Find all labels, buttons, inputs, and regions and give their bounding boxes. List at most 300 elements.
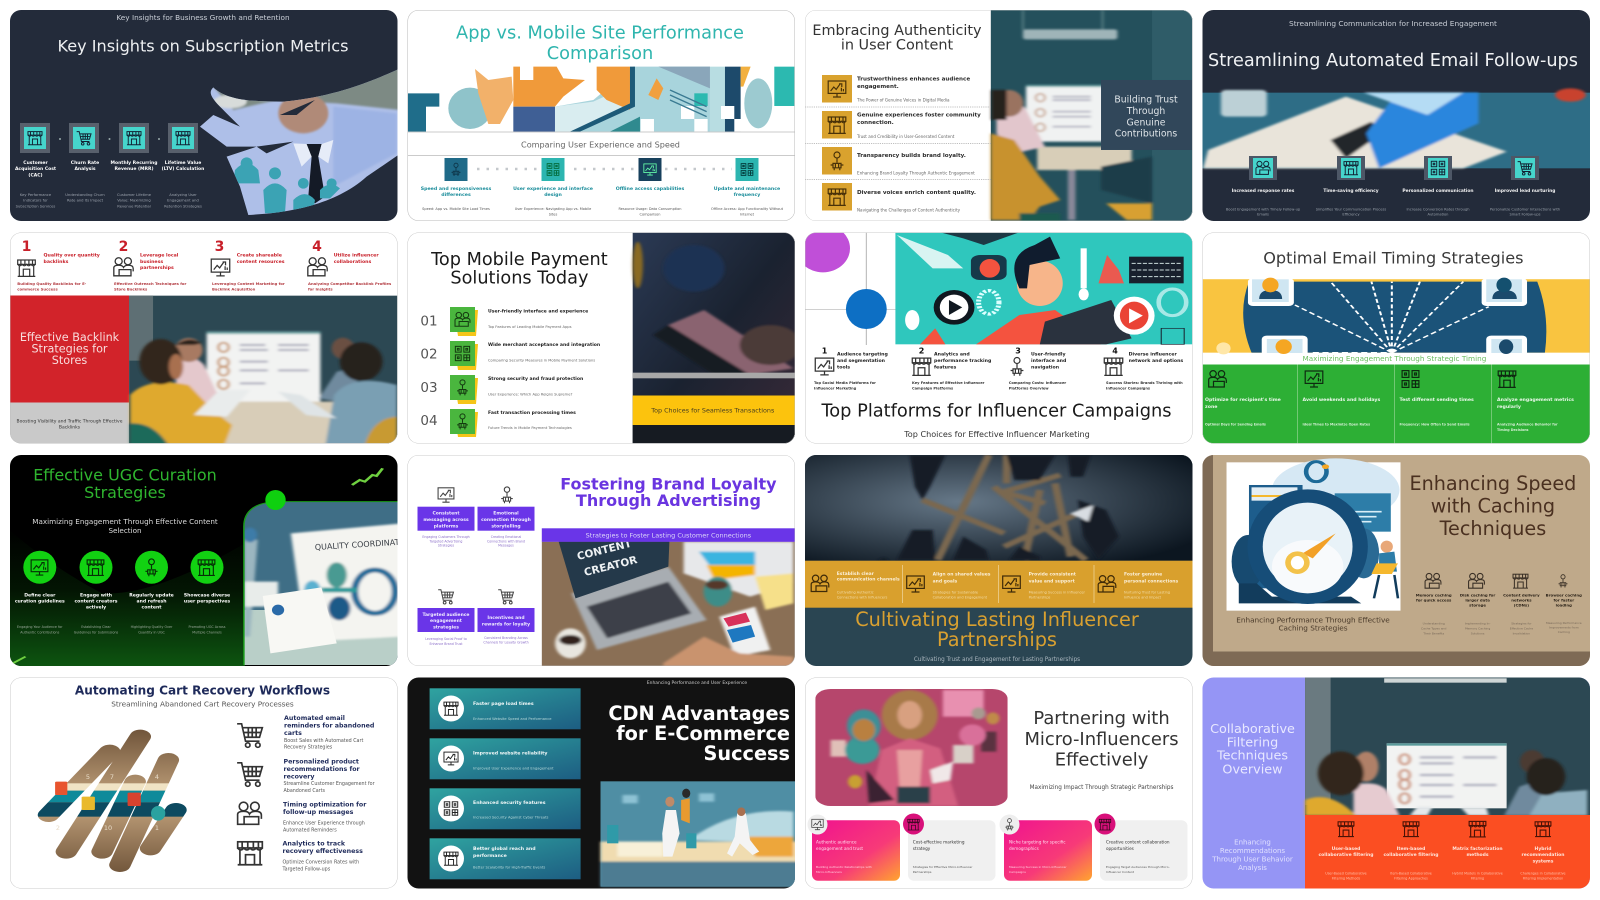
step headings: Leverage local	[140, 252, 179, 258]
list descriptions: Optimize Conversion Rates with	[282, 860, 359, 866]
step descriptions: Effective Outreach Techniques for	[114, 281, 186, 286]
title: Key Insights on Subscription Metrics	[57, 36, 349, 56]
dark frame	[1202, 455, 1591, 667]
numbers: 01	[420, 314, 438, 330]
title: Cultivating Lasting Influencer	[855, 608, 1139, 631]
metric labels: (CAC)	[28, 172, 43, 178]
diagonal wood stripes chart	[26, 727, 194, 877]
stripe numbers: 2	[56, 824, 60, 832]
descriptions: Establishing Clear	[81, 625, 111, 629]
green icons	[450, 307, 478, 437]
card headings: Authentic audience	[816, 840, 857, 844]
green columns: Frequency: How Often to Send Emails	[1400, 422, 1470, 426]
descriptions: Automation	[1428, 212, 1448, 216]
subtitle: Streamlining Communication for Increased Engagement	[1289, 19, 1497, 28]
decorative circles	[796, 224, 897, 345]
feature descriptions: Hybrid Models in Collaborative	[1452, 872, 1503, 876]
title: App vs. Mobile Site Performance	[456, 22, 744, 43]
numbers: 04	[420, 413, 438, 429]
band headings: Align on shared values	[933, 572, 991, 578]
strategy descriptions: Connections with Brand	[487, 539, 525, 543]
metric descriptions: Engagement and	[167, 198, 199, 202]
technique labels: larger data	[1465, 598, 1490, 602]
list descriptions: Enhance User Experience through	[283, 820, 365, 826]
photo: phone payment with caption band: Top Choices for Seamless Transactions	[650, 407, 775, 415]
descriptions: Quantity in UGC	[138, 630, 166, 634]
descriptions: Smart Follow-ups	[1509, 212, 1541, 216]
panel: Embracing Authenticity in User Content	[805, 10, 1195, 223]
step headings: Audience targeting	[837, 352, 888, 358]
metric descriptions: Subscription Services	[16, 204, 55, 208]
step icons	[815, 358, 1123, 376]
photo: quality coordinator certificates	[243, 490, 403, 667]
title: Automating Cart Recovery Workflows	[75, 684, 330, 698]
step headings: content resources	[237, 259, 285, 265]
descriptions: Simplifies Your Communication Process	[1316, 208, 1386, 212]
card descriptions: Campaigns	[1009, 870, 1026, 874]
title: Through Advertising	[576, 491, 761, 510]
subtitle: Analysis	[1238, 864, 1267, 872]
green columns: Analyzing Audience Behavior for	[1497, 422, 1558, 426]
step headings: navigation	[1031, 364, 1059, 370]
metric labels: Revenue (MRR)	[114, 166, 154, 172]
numbers: 02	[420, 346, 438, 362]
list headings: connection.	[857, 120, 894, 126]
subtitle: Caching Strategies	[1278, 624, 1348, 633]
screen text: CREATOR	[583, 554, 639, 579]
purple strategy buttons: Consistent	[432, 510, 460, 516]
descriptions: Personalize Customer Interactions with	[1490, 208, 1560, 212]
list descriptions: Abandoned Carts	[284, 788, 325, 794]
band headings: communication channels	[837, 576, 900, 582]
step descriptions: Comparing Costs: Influencer	[1009, 381, 1066, 385]
labels: Engage with	[80, 592, 112, 598]
title: Optimal Email Timing Strategies	[1263, 248, 1524, 267]
step headings: interface and	[1031, 358, 1066, 364]
screen text: CONTENT	[576, 538, 634, 563]
card descriptions	[816, 865, 1170, 874]
card headings: opportunities	[1106, 846, 1134, 851]
technique descriptions: Effective Cache	[1510, 626, 1533, 630]
technique descriptions: Solutions	[1471, 632, 1485, 636]
step descriptions: Backlink Acquisition	[212, 286, 256, 292]
feature labels: Offline access capabilities	[616, 186, 684, 192]
panel: Effective Backlink Strategies for Stores	[10, 232, 399, 445]
red title block: Effective Backlink	[20, 331, 120, 344]
card descriptions: Building Authentic Relationships with	[816, 865, 872, 869]
technique labels: loading	[1556, 602, 1572, 608]
feature labels: User experience and interface	[513, 186, 593, 192]
photo: woman in pink blazer with floating objects	[815, 689, 1008, 806]
descriptions: Engaging Your Audience for	[17, 625, 63, 629]
subtitle: Streamlining Abandoned Cart Recovery Processes	[111, 700, 294, 709]
orange features block	[1305, 815, 1591, 890]
card headings: Cost-effective marketing	[913, 840, 965, 844]
list headings: engagement.	[857, 84, 899, 90]
feature labels: collaborative filtering	[1319, 852, 1373, 858]
band headings: Provide consistent	[1029, 572, 1077, 578]
subtitle strip	[407, 132, 795, 156]
title: Overview	[1222, 762, 1283, 777]
list headings: Genuine experiences foster community	[857, 112, 981, 118]
illustration: man with megaphone on teal	[895, 232, 1196, 344]
title: Top Mobile Payment	[430, 250, 608, 270]
grey subtitle block	[10, 402, 129, 444]
step headings: tools	[837, 364, 850, 370]
panel: Top Platforms for Influencer Campaigns	[796, 224, 1196, 444]
descriptions: Highlighting Quality Over	[131, 625, 173, 629]
step descriptions: Top Social Media Platforms for	[814, 381, 876, 385]
photo: businessman in blue shirt revealed through a torn shape	[197, 67, 400, 217]
card descriptions: Micro-Influencers	[816, 870, 842, 874]
metric labels: Analysis	[74, 166, 96, 172]
list headings: recovery	[284, 774, 315, 781]
metric descriptions: Understanding Churn	[65, 193, 105, 197]
panel: Streamlining Automated Email Follow-ups	[1201, 10, 1593, 221]
illustration: speed gauge with server	[1227, 458, 1401, 611]
step descriptions: Analyzing Competitor Backlink Profiles	[308, 281, 392, 286]
labels: Improved lead nurturing	[1495, 188, 1555, 194]
step numbers: 3	[215, 239, 224, 255]
list headings: Fast transaction processing times	[488, 410, 576, 416]
feature descriptions: User Experience: Navigating App vs. Mobile	[515, 207, 591, 211]
green background wave	[8, 468, 383, 667]
technique labels: (CDNs)	[1514, 602, 1529, 608]
photo: people climbing wooden scaffold	[800, 453, 1198, 561]
card descriptions: Engaging Target Audiences through Micro-	[1106, 865, 1170, 869]
list headings: recommendations for	[284, 766, 361, 773]
title: Collaborative	[1210, 722, 1295, 737]
feature labels: Speed and responsiveness	[421, 186, 491, 192]
feature labels: systems	[1533, 858, 1554, 864]
stripe numbers: 1	[155, 824, 159, 832]
feature descriptions: Filtering Methods	[1332, 877, 1360, 881]
icon row	[20, 123, 198, 153]
band descriptions: Measuring Success in Influencer	[1029, 590, 1086, 594]
card headings: engagement and trust	[816, 846, 863, 851]
descriptions: Increase Conversion Rates through	[1406, 208, 1470, 212]
panel: Top Mobile Payment Solutions Today	[408, 232, 801, 444]
list headings: follow-up messages	[283, 809, 354, 816]
metric labels: Acquisition Cost	[15, 166, 57, 172]
panel: Collaborative Filtering Techniques Overview	[1202, 677, 1596, 890]
step headings: backlinks	[44, 259, 69, 265]
side caption: Genuine	[1127, 117, 1166, 128]
title: Partnering with	[1033, 708, 1170, 729]
feature labels: User-based	[1332, 846, 1360, 852]
step descriptions: Success Stories: Brands Thriving with	[1106, 381, 1183, 385]
list headings: Transparency builds brand loyalty.	[857, 153, 966, 159]
panel: Cultivating Lasting Influencer Partnerships	[800, 453, 1198, 666]
step numbers: 4	[312, 239, 322, 255]
technique descriptions: Improvements from	[1549, 626, 1579, 630]
metric labels: Monthly Recurring	[111, 160, 157, 166]
technique labels: Disk caching for	[1460, 592, 1495, 598]
feature labels: methods	[1466, 852, 1489, 858]
photo: team meeting at whiteboard	[129, 296, 399, 445]
purple strategy buttons: rewards for loyalty	[482, 622, 530, 628]
list descriptions: Automated Reminders	[283, 828, 337, 834]
band headings: personal connections	[1124, 578, 1178, 584]
subtitle: Cultivating Trust and Engagement for Lasting Partnerships	[914, 657, 1080, 663]
feature labels: Hybrid	[1535, 846, 1551, 852]
band descriptions: Strategies for Sustainable	[933, 590, 978, 594]
card headings: demographics	[1009, 846, 1039, 851]
technique labels: Browser caching	[1546, 592, 1582, 598]
feature labels: design	[544, 192, 562, 198]
list headings: Trustworthiness enhances audience	[857, 76, 970, 82]
step numbers: 1	[22, 239, 31, 255]
labels: content creators	[74, 598, 118, 604]
list headings: Wide merchant acceptance and integration	[488, 342, 600, 348]
green columns: regularly	[1497, 404, 1521, 410]
feature headings: Faster page load times	[473, 701, 534, 707]
feature descriptions: Item-Based Collaborative	[1390, 872, 1432, 876]
panel: Automating Cart Recovery Workflows	[10, 678, 398, 888]
subtitle: Selection	[108, 526, 142, 535]
panel: Partnering with Micro-Influencers Effectively	[805, 678, 1192, 888]
card descriptions: Measuring Success in Micro-Influencer	[1009, 865, 1067, 869]
step headings: Diverse influencer	[1129, 352, 1177, 358]
metric descriptions: Value: Maximizing	[117, 198, 151, 202]
technique descriptions: Their Benefits	[1422, 632, 1445, 636]
teal icons	[1249, 156, 1539, 180]
step headings: Create shareable	[237, 252, 282, 258]
feature descriptions: Offline Access: App Functionality Without	[711, 207, 784, 211]
numbers: 03	[420, 380, 438, 396]
band headings: value and support	[1029, 578, 1076, 584]
feature labels: recommendation	[1522, 852, 1564, 858]
tagline: Maximizing Engagement Through Strategic Timing	[1302, 354, 1486, 363]
descriptions: Promoting UGC Across	[189, 625, 226, 629]
list descriptions: User Experience: Which App Reigns Supreme?	[488, 392, 572, 396]
technique labels: Content delivery	[1503, 592, 1540, 598]
technique descriptions: Caching	[1558, 630, 1570, 634]
step descriptions: Store Backlinks	[114, 286, 148, 292]
labels: Personalized communication	[1402, 188, 1474, 194]
band descriptions: Collaboration and Engagement	[933, 596, 988, 600]
list descriptions: Navigating the Challenges of Content Authenticity	[857, 208, 961, 212]
descriptions: Efficiency	[1342, 212, 1361, 216]
subtitle: Key Insights for Business Growth and Retention	[116, 13, 290, 22]
strategy descriptions: Creating Emotional	[491, 535, 521, 539]
feature descriptions: Increased Security Against Cyber Threats	[473, 816, 549, 820]
feature descriptions: Filtering	[1471, 877, 1484, 881]
card descriptions: Influencer Content	[1106, 870, 1135, 874]
feature descriptions: Filtering Implementation	[1523, 877, 1563, 881]
green columns: Avoid weekends and holidays	[1302, 397, 1380, 403]
list descriptions: Targeted Follow-ups	[282, 866, 331, 872]
labels: and refresh	[136, 598, 167, 604]
feature labels: collaborative filtering	[1384, 852, 1438, 858]
photo: laptop, papers and blue envelope	[1201, 88, 1593, 168]
purple strategy buttons: strategies	[433, 624, 459, 630]
feature descriptions: Resource Usage: Data Consumption	[618, 207, 682, 211]
list headings: Automated email	[284, 715, 345, 722]
band descriptions: Connections with Influencers	[837, 596, 888, 600]
step numbers: 1	[822, 346, 828, 356]
purple strategy buttons: Emotional	[493, 510, 519, 516]
panel: Effective UGC Curation Strategies	[8, 455, 412, 667]
metric descriptions: Customer Lifetime	[117, 193, 152, 197]
step descriptions: commerce Success	[17, 286, 58, 292]
step headings: Utilize influencer	[334, 252, 379, 258]
step headings: business	[140, 259, 163, 265]
card headings: strategy	[913, 846, 931, 851]
feature labels: differences	[441, 192, 471, 198]
technique descriptions: Implementing In-	[1465, 622, 1490, 626]
labels: Increased response rates	[1232, 188, 1295, 194]
step headings: partnerships	[140, 265, 174, 271]
metric descriptions: Revenue Potential	[117, 204, 151, 208]
green columns: zone	[1205, 405, 1217, 410]
technique descriptions: Invalidation	[1513, 632, 1530, 636]
title: for E-Commerce	[616, 722, 790, 745]
step descriptions: Leveraging Content Marketing for	[212, 281, 285, 286]
purple strategy buttons: platforms	[434, 523, 459, 529]
step headings: Quality over quantity	[44, 252, 100, 258]
title: with Caching	[1431, 495, 1555, 518]
band headings: and goals	[933, 578, 958, 584]
list descriptions: Comparing Security Measures in Mobile Payment Solutions	[488, 358, 595, 362]
step headings: and segmentation	[837, 358, 885, 364]
panel: App vs. Mobile Site Performance Comparison	[407, 10, 795, 221]
band descriptions: Influence and Impact	[1124, 596, 1162, 600]
title: CDN Advantages	[608, 702, 790, 725]
subtitle: Recommendations	[1220, 847, 1285, 855]
illustration: people in a digital landscape	[601, 781, 799, 887]
list descriptions: Boost Sales with Automated Cart	[284, 738, 363, 744]
descriptions: Multiple Channels	[192, 630, 222, 634]
green columns: Ideal Times to Maximize Open Rates	[1302, 422, 1370, 426]
list headings: Diverse voices enrich content quality.	[857, 190, 976, 196]
feature headings: Improved website reliability	[473, 750, 547, 756]
title: Success	[703, 742, 790, 765]
list headings: Strong security and fraud protection	[488, 376, 583, 382]
feature labels: Matrix factorization	[1452, 846, 1503, 852]
card descriptions: Strategies for Effective Micro-Influencer	[913, 865, 973, 869]
title: Top Platforms for Influencer Campaigns	[820, 401, 1172, 422]
title: Filtering	[1227, 735, 1278, 750]
step descriptions: Platforms Overview	[1009, 386, 1049, 390]
illustration: radial connections between people	[1201, 278, 1593, 356]
labels: Regularly update	[129, 592, 174, 598]
subtitle: Enhancing Performance Through Effective	[1236, 616, 1390, 625]
green columns: Test different sending times	[1400, 397, 1474, 403]
title: Partnerships	[937, 628, 1057, 651]
feature descriptions: Better Scalability for High-Traffic Events	[473, 866, 545, 870]
step numbers: 2	[919, 346, 924, 356]
step descriptions: Influencer Marketing	[814, 386, 857, 390]
step headings: performance tracking	[934, 358, 991, 364]
descriptions: Guidelines for Submissions	[74, 630, 119, 634]
purple strategy buttons	[418, 507, 534, 632]
metric labels: Lifetime Value	[165, 160, 201, 166]
feature labels: Update and maintenance	[714, 186, 780, 192]
feature descriptions: Filtering Approaches	[1394, 877, 1428, 881]
labels: actively	[86, 604, 106, 610]
labels: user perspectives	[184, 598, 230, 604]
title: Comparison	[547, 43, 653, 64]
purple strategy buttons: Targeted audience	[422, 612, 470, 618]
technique labels: for quick access	[1416, 598, 1452, 602]
strategy descriptions: Messages	[498, 544, 514, 548]
stripe numbers: 7	[110, 773, 114, 781]
feature headings: Enhanced security features	[473, 800, 546, 806]
technique descriptions: Strategies for	[1511, 622, 1532, 626]
strategy descriptions: Enhance Brand Trust	[430, 642, 463, 646]
descriptions: Emails	[1257, 212, 1269, 216]
title: Strategies	[84, 483, 166, 502]
subtitle band: Strategies to Foster Lasting Customer Connections	[586, 531, 752, 539]
green columns: Analyze engagement metrics	[1497, 397, 1574, 403]
step numbers: 3	[1015, 346, 1021, 356]
screen text	[576, 538, 639, 579]
list headings: recovery effectiveness	[282, 848, 363, 855]
feature headings: performance	[473, 853, 507, 859]
red title block	[10, 296, 129, 402]
metric descriptions: Analyzing User	[169, 193, 197, 197]
feature headings: Better global reach and	[473, 846, 536, 852]
band icons	[811, 575, 1116, 592]
title: Effectively	[1055, 750, 1149, 771]
subtitle: Enhancing	[1234, 838, 1271, 846]
purple strategy buttons: storytelling	[491, 523, 521, 529]
side caption: Through	[1126, 106, 1165, 117]
step headings: collaborations	[334, 259, 372, 265]
card headings	[816, 840, 1170, 851]
technique icons	[1425, 573, 1567, 588]
list headings: carts	[284, 730, 302, 737]
metric descriptions: Rate and Its Impact	[67, 198, 104, 202]
title: Techniques	[1216, 749, 1288, 764]
list separators	[805, 107, 991, 180]
step descriptions: Key Features of Effective Influencer	[912, 381, 985, 385]
title: Techniques	[1439, 517, 1546, 540]
list headings: Personalized product	[284, 758, 359, 765]
gold band with dividers	[805, 561, 1193, 608]
technique labels: for faster	[1553, 598, 1574, 602]
green columns: Timing Decisions	[1497, 428, 1529, 432]
purple strategy buttons: Incentives and	[487, 615, 525, 621]
certificate heading: QUALITY COORDINATOR	[315, 537, 412, 552]
title: Streamlining Automated Email Follow-ups	[1208, 51, 1578, 71]
photo: meeting room with whiteboard	[991, 10, 1195, 223]
feature descriptions: User-Based Collaborative	[1325, 872, 1367, 876]
strategy descriptions: Strategies	[438, 544, 454, 548]
subtitle: Enhancing Performance and User Experience	[647, 680, 747, 686]
strategy descriptions: Channels for Loyalty Growth	[483, 640, 529, 644]
feature descriptions: Speed: App vs. Mobile Site Load Times	[422, 207, 490, 211]
card headings: Creative content collaboration	[1106, 840, 1170, 844]
strategy descriptions: Consistent Branding Across	[484, 636, 528, 640]
list headings: reminders for abandoned	[284, 722, 374, 730]
purple strategy buttons: connection through	[481, 517, 531, 523]
stripe numbers: 4	[155, 773, 159, 781]
step icons	[18, 258, 327, 276]
technique labels: Memory caching	[1416, 592, 1452, 598]
list descriptions: The Power of Genuine Voices in Digital Media	[856, 98, 950, 102]
metric descriptions: Key Performance	[20, 193, 52, 197]
gradient and grey feature cards	[812, 820, 1188, 881]
metric descriptions: Retention Strategies	[164, 204, 202, 208]
band headings: Establish clear	[837, 571, 875, 577]
title: in User Content	[841, 38, 954, 54]
stripe numbers: 5	[86, 773, 90, 781]
step headings: features	[934, 364, 956, 370]
descriptions: Boost Engagement with Timely Follow-up	[1226, 208, 1301, 212]
green columns: Optimal Days for Sending Emails	[1205, 422, 1266, 426]
